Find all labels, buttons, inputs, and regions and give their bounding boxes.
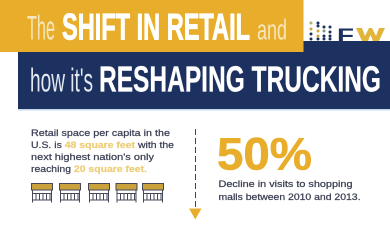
text block: decline in visits: malls between 2010 and 2013.	[218, 192, 360, 202]
text block: decline in visits	[218, 179, 360, 202]
icon: mall 1	[32, 184, 52, 202]
arrow: dashed downward	[189, 129, 202, 220]
text block: retail space per capita	[31, 128, 174, 175]
statistic: 50%: 50%	[217, 128, 312, 180]
logo: FW: F	[337, 26, 354, 46]
divider line	[18, 109, 390, 110]
icon: mall 4	[116, 184, 137, 202]
text block: retail space per capita: U.S. is 48 square feet with the	[31, 140, 174, 151]
header band: yellow: SHIFT IN RETAIL	[62, 6, 250, 48]
header band: navy: how it's	[30, 62, 93, 98]
icon row: five malls	[32, 184, 164, 202]
header band: yellow	[0, 0, 304, 52]
icon: mall 3	[88, 184, 110, 202]
icon: mall 5	[142, 184, 164, 202]
icon: mall 2	[60, 184, 80, 202]
header band: navy	[18, 41, 390, 109]
header band: yellow: The	[27, 10, 55, 48]
text block: decline in visits: Decline in visits to shopping	[218, 179, 352, 189]
text block: retail space per capita: reaching 20 square feet.	[31, 164, 147, 175]
text block: retail space per capita: Retail space per capita in the	[31, 128, 170, 139]
logo: FW	[310, 22, 385, 46]
text block: retail space per capita: next highest nation's only	[31, 152, 154, 163]
header band: yellow: and	[257, 14, 287, 46]
